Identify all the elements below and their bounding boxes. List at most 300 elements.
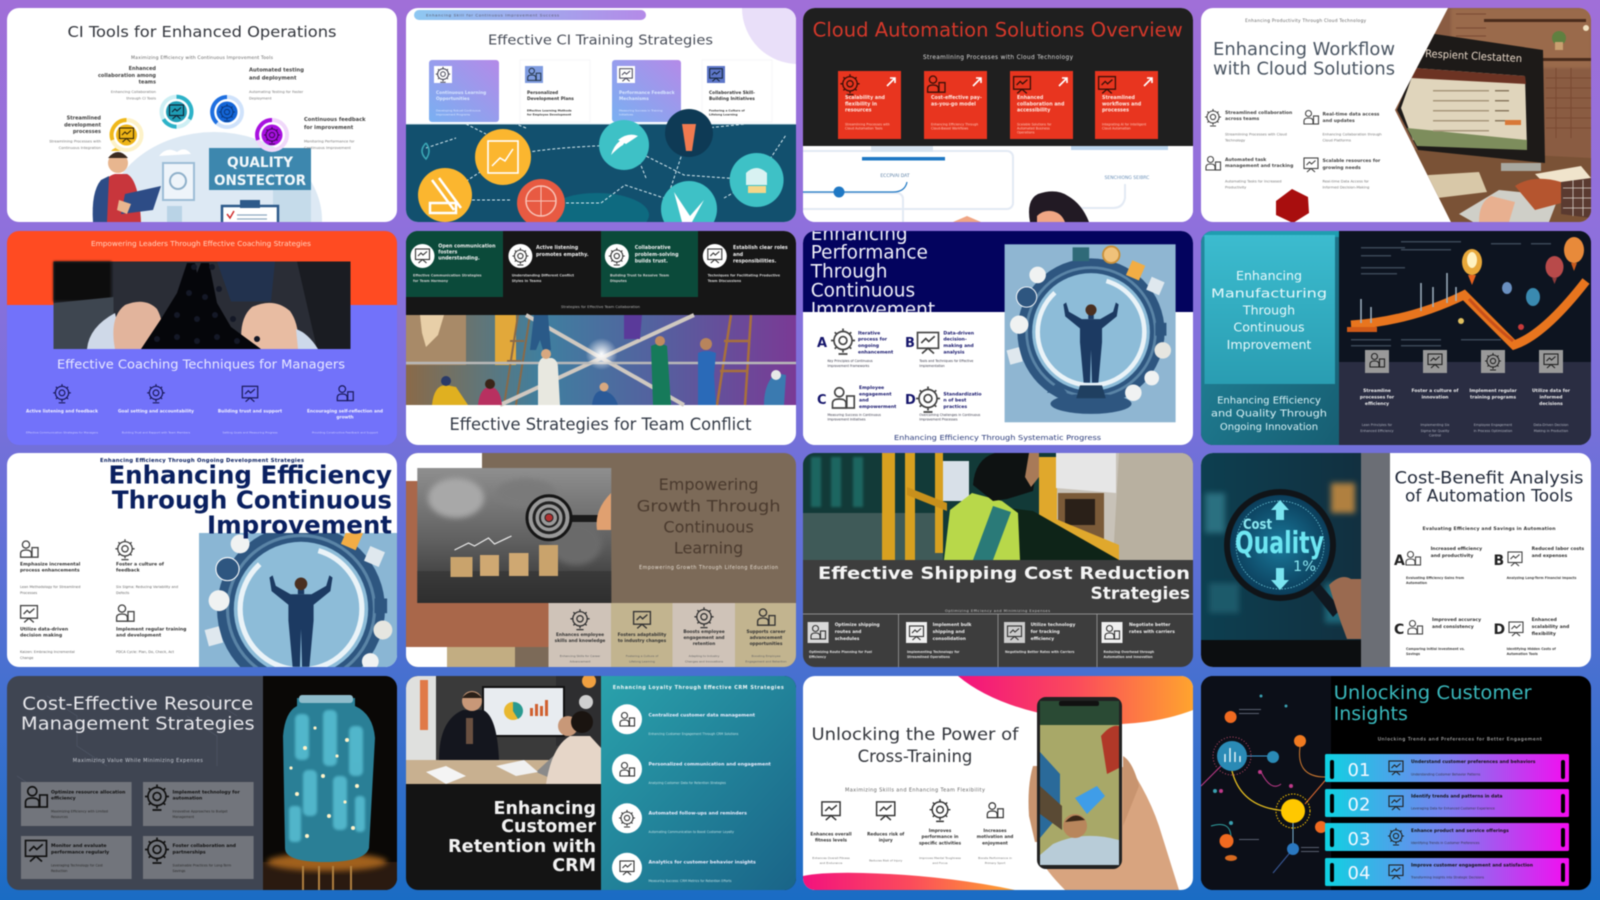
item: streamline <box>1359 350 1394 433</box>
illustration: hand holding phone <box>1028 697 1178 890</box>
item: roles: Team Discussions <box>707 279 741 283</box>
card: monitor: Monitor and evaluate <box>51 843 107 849</box>
card: collaboration: collaboration and <box>1016 101 1064 107</box>
subtitle: Ongoing Innovation <box>1219 422 1318 433</box>
item: training: PDCA Cycle: Plan, Do, Check, Act <box>116 650 175 654</box>
card: development plans: for Employee Development <box>526 112 571 116</box>
card: development plans: Development Plans <box>526 96 574 102</box>
item: bulk <box>906 622 971 659</box>
card: workflows <box>1094 71 1158 139</box>
photo: cafe monitor: Respient Clestatten <box>1424 48 1522 65</box>
item B: Data-driven <box>943 330 974 336</box>
item: incremental: process enhancements <box>20 568 80 574</box>
card: development plans <box>520 60 590 122</box>
photo: blocks and magnifier <box>417 468 611 603</box>
item: adaptability: Fosters adaptability <box>617 632 666 638</box>
item: performance: Improves Mental Toughness <box>919 856 961 860</box>
item: real-time: and updates <box>1322 118 1355 124</box>
photo: magnifying glass <box>1200 453 1390 667</box>
item: engagement: Changes and Innovations <box>684 660 723 664</box>
panel: Enhancing Efficiency Through Continuous Improvement <box>7 453 397 667</box>
item: data: Change <box>20 656 33 660</box>
item: communication: Analyzing Customer Data for Retention Strategies <box>648 781 726 785</box>
item: career <box>734 603 796 667</box>
illustration: quality inspector: QUALITY <box>227 155 294 171</box>
item C <box>816 385 897 421</box>
item: listening: Understanding Different Conflict <box>511 274 574 278</box>
card: collaborative: Fostering a Culture of <box>708 108 745 112</box>
heading: Enhancing Loyalty Through Effective CRM Strategies <box>612 685 783 691</box>
item: collaboration: Streamlined collaboration <box>1224 110 1292 116</box>
bar 02 <box>1324 789 1568 817</box>
illustration: quality inspector: ONSTECTOR <box>214 173 306 189</box>
title: Manufacturing <box>1210 285 1326 300</box>
colour blocks <box>406 453 548 667</box>
card: development plans: Effective Learning Methods <box>526 108 571 112</box>
item: culture: Sigma for Quality <box>1420 429 1449 433</box>
card: feedback: Performance Feedback <box>618 90 674 96</box>
icon: purple ring <box>257 120 287 150</box>
dark header <box>802 8 1192 146</box>
item: resources: Informed Decision-Making <box>1322 185 1369 189</box>
header pill: Enhancing Skill for Continuous Improvement Success <box>426 13 559 18</box>
item: analytics: Measuring Success: CRM Metrics for Retention Efforts <box>648 879 731 883</box>
item: listening <box>508 244 588 283</box>
orange header band <box>7 231 397 305</box>
card: workflows: Cloud Automation <box>1102 126 1130 130</box>
item: tracking <box>1004 622 1075 654</box>
item B: Reduced labor costs <box>1531 546 1584 552</box>
item: routes: Optimize shipping <box>834 622 879 628</box>
item: culture: Six Sigma: Reducing Variability and <box>116 585 178 589</box>
title: Continuous <box>663 518 753 537</box>
illustration: quality inspector <box>93 132 322 308</box>
card: scalability: flexibility in <box>844 101 877 107</box>
panel: Effective Coaching Techniques for Managers <box>7 231 397 445</box>
card: collaboration: accessibility <box>1016 107 1051 113</box>
card: allocation: efficiency <box>51 796 76 802</box>
card: workflows: workflows and <box>1102 101 1141 107</box>
title: Unlocking the Power of <box>811 725 1019 744</box>
title: with Cloud Solutions <box>1212 60 1394 80</box>
panel: Unlocking Customer Insights <box>1200 676 1590 890</box>
item: trust: Building trust and support <box>218 408 282 414</box>
item: listening: Active listening and feedback <box>26 408 98 414</box>
item: communication: Personalized communication and engagement <box>648 762 771 768</box>
item: tasks: Automated task <box>1224 157 1267 163</box>
item: injury: Reduces Risk of Injury <box>869 858 902 862</box>
item: communication <box>612 754 771 785</box>
item: streamline: Enhanced Efficiency <box>1360 429 1393 433</box>
feature: development: Continuous Integration <box>59 146 102 150</box>
item: performance: and Focus <box>932 861 948 865</box>
item: career: advancement <box>749 635 782 641</box>
title: Cost-Effective Resource <box>22 693 253 714</box>
item: career: Boosting Employee <box>751 654 780 658</box>
item: listening: Styles in Teams <box>511 279 541 283</box>
item A: enhancement <box>858 349 894 355</box>
card: partnerships: Savings <box>172 869 186 873</box>
card: collaborative: Lifelong Learning <box>708 112 737 116</box>
item: routes: Optimizing Route Planning for Fuel <box>808 650 872 654</box>
item: roles: Techniques for Facilitating Productive <box>707 274 780 278</box>
panel: Enhancing Workflow with Cloud Solutions <box>1200 8 1590 222</box>
item: tracking: Utilize technology <box>1030 622 1075 628</box>
feature: testing <box>249 67 304 100</box>
card: scalability: Streamlining Processes with <box>844 122 889 126</box>
card: partnerships <box>143 836 254 879</box>
item: training: Implement regular <box>1469 388 1517 394</box>
title: Performance <box>810 242 927 263</box>
card: scalability: Cloud Automation Tools <box>844 126 882 130</box>
subtitle: Maximizing Value While Minimizing Expenses <box>73 758 203 764</box>
panel: Unlocking the Power of Cross-Training <box>802 676 1192 890</box>
item: adaptability: to industry changes <box>617 638 666 644</box>
title: Enhancing Workflow <box>1212 40 1394 60</box>
card: cost-effective <box>924 71 986 139</box>
item: data: Kaizen: Embracing Incremental <box>20 650 75 654</box>
subtitle: Maximizing Efficiency with Continuous Improvement Tools <box>131 55 274 61</box>
bar 01: Understanding Customer Behavior Patterns <box>1410 772 1480 776</box>
item: communication <box>410 244 496 283</box>
bar 03: Identifying Trends in Customer Preferences <box>1410 841 1479 845</box>
item: tracking: Negotiating Better Rates with Carriers <box>1004 650 1074 654</box>
item: adaptability <box>610 603 672 667</box>
item: reflection: growth <box>336 414 354 420</box>
item: problem solving <box>604 244 679 283</box>
card: collaborative: Building Initiatives <box>708 96 755 102</box>
card: partnerships: Sustainable Practices for Long-Term <box>172 863 231 867</box>
item: resources: Real-time Data Access for <box>1322 179 1369 183</box>
item: goal setting: Goal setting and accountability <box>118 408 194 414</box>
card: partnerships: partnerships <box>172 849 206 855</box>
item: bulk: Streamlined Operations <box>906 655 949 659</box>
card: monitor: performance regularly <box>51 849 109 855</box>
item: motivation: Boosts Performance in <box>978 856 1011 860</box>
item: carriers: Automation and Innovation <box>1103 655 1153 659</box>
grid dividers <box>802 614 1192 667</box>
item D: D <box>904 393 916 408</box>
item B <box>1493 546 1584 580</box>
item: training <box>1469 350 1517 433</box>
illustration: dark roadmap with balloons <box>1338 231 1590 362</box>
item: goal setting: Building Trust and Rapport with Team Members <box>122 431 191 435</box>
bar 01: Understand customer preferences and behaviors <box>1410 759 1535 765</box>
card: learning <box>428 60 498 122</box>
item: motivation <box>976 803 1013 865</box>
card: technology: Innovative Approaches to Budget <box>172 810 228 814</box>
item C: and consistency <box>1432 624 1473 630</box>
item: performance: Improves <box>928 828 951 834</box>
item: performance <box>918 799 961 865</box>
title: Cloud Automation Solutions Overview <box>812 19 1182 42</box>
item: resources: growing needs <box>1322 165 1360 171</box>
feature: collaboration: through CI Tools <box>126 96 156 100</box>
item D: Improvement Processes <box>919 417 957 421</box>
card: collaborative <box>702 60 772 122</box>
item D: scalability and <box>1531 624 1569 630</box>
item: training: Implement regular training <box>116 626 186 632</box>
item: communication: Effective Communication Strategies <box>412 274 481 278</box>
item: routes: schedules <box>834 636 859 642</box>
navy header <box>802 231 1192 312</box>
card: technology: Management <box>172 815 195 819</box>
item: culture: innovation <box>1421 394 1448 400</box>
feature: collaboration: Enhancing Collaboration <box>111 90 157 94</box>
item A: and productivity <box>1430 553 1473 559</box>
title: Cost-Benefit Analysis <box>1394 468 1583 488</box>
item: skills <box>548 603 610 667</box>
item: data <box>612 704 755 736</box>
item: data: informed <box>1539 394 1562 400</box>
subtitle: Enhancing Efficiency <box>1217 395 1320 406</box>
item: carriers <box>1101 622 1175 659</box>
item C: and <box>858 398 868 404</box>
item: engagement <box>672 603 734 667</box>
card: allocation: Optimize resource allocation <box>51 789 125 795</box>
item A: A <box>816 336 827 351</box>
item: culture: Foster a culture of <box>1411 388 1458 394</box>
card: collaboration: Operations <box>1016 130 1034 134</box>
title: Retention with <box>448 837 596 857</box>
right teal column <box>600 676 796 890</box>
card: cost-effective: as-you-go model <box>930 101 976 107</box>
title clip band <box>802 312 1002 445</box>
panel: CI Tools for Enhanced Operations <box>7 8 397 222</box>
item: incremental: Processes <box>20 591 37 595</box>
title: Customer <box>501 817 596 837</box>
title: Effective Strategies for Team Conflict <box>449 415 752 434</box>
title: Strategies <box>1090 584 1190 604</box>
card: technology: Implement technology for <box>172 789 240 795</box>
item A: Evaluating Efficiency Gains from <box>1406 576 1464 580</box>
bar 04: 04 <box>1347 863 1370 884</box>
feature: development: processes <box>73 129 101 135</box>
item: training <box>116 605 186 654</box>
photo: warehouse worker <box>802 453 1192 560</box>
item B: analysis <box>943 349 964 355</box>
card: collaboration: Automated Business <box>1016 126 1050 130</box>
item: motivation: enjoyment <box>982 840 1007 846</box>
item: tracking: efficiency <box>1030 636 1054 642</box>
item: training: in Process Optimization <box>1473 429 1512 433</box>
item: listening <box>26 384 98 435</box>
feature: feedback <box>304 117 366 150</box>
footer caption: Enhancing Efficiency Through Systematic Progress <box>894 433 1101 442</box>
card: collaboration <box>1010 71 1072 139</box>
card: feedback: Mechanisms <box>618 96 649 102</box>
feature: testing: Automated testing <box>249 67 304 73</box>
item: trust: Setting Goals and Measuring Progress <box>223 431 278 435</box>
panel: Effective Shipping Cost Reduction Strategies <box>802 453 1192 667</box>
subtitle: Streamlining Processes with Cloud Technology <box>922 55 1073 61</box>
item: reflection: Providing Constructive Feedback and Support <box>312 431 379 435</box>
title: Empowering <box>658 475 758 494</box>
item: training: training programs <box>1469 394 1516 400</box>
band caption: Strategies for Effective Team Collaboration <box>560 305 640 309</box>
panel: Effective Strategies for Team Conflict <box>406 231 796 445</box>
feature: testing: Deployment <box>249 96 272 100</box>
feature: collaboration: collaboration among <box>98 73 156 79</box>
item: real-time <box>1304 110 1381 142</box>
item: data: Utilize data-driven <box>20 626 68 632</box>
item: follow-ups: Automating Communication to Boost Customer Loyalty <box>648 830 734 834</box>
card: monitor: Leveraging Technology for Cost <box>51 863 104 867</box>
item: routes <box>807 622 879 659</box>
card: learning: Opportunities <box>436 96 469 102</box>
title: Enhancing <box>493 799 596 819</box>
card: collaborative: Collaborative Skill- <box>708 90 755 96</box>
item: data: Enhancing Customer Engagement Through CRM Solutions <box>648 732 738 736</box>
panel: Enhancing Manufacturing Through Continuous Improvement <box>1200 231 1590 445</box>
card: partnerships: Foster collaboration and <box>172 843 236 849</box>
card: collaboration: Enhanced <box>1016 95 1043 101</box>
item: carriers: Reducing Overhead through <box>1103 650 1154 654</box>
item: tasks <box>1206 156 1293 189</box>
item: skills: Advancement <box>569 660 591 664</box>
item: culture: feedback <box>116 568 141 574</box>
item: data <box>20 606 75 660</box>
item: bulk: shipping and <box>932 629 964 635</box>
card: cost-effective: Enhancing Efficiency Through <box>930 122 978 126</box>
item: listening: Active listening <box>536 245 578 251</box>
item C: C <box>1394 622 1404 638</box>
title: Effective CI Training Strategies <box>488 32 712 48</box>
card: learning: Improvement Programs <box>436 112 470 116</box>
item C: Improvement Initiatives <box>827 417 865 421</box>
item: problem solving: Collaborative <box>634 245 671 251</box>
item D: practices <box>943 404 967 410</box>
item A: process for <box>858 337 887 343</box>
item: adaptability: Lifelong Learning <box>629 660 655 664</box>
item: communication: for Team Harmony <box>412 279 448 283</box>
bar 01 <box>1324 754 1568 782</box>
item: streamline: processes for <box>1359 394 1394 400</box>
item D: Automation Tools <box>1506 652 1537 656</box>
item: resources: Scalable resources for <box>1322 158 1381 164</box>
item: fitness: Enhances Overall Fitness <box>812 856 850 860</box>
gradient blob top <box>958 676 1192 724</box>
item: career: Engagement and Retention <box>745 660 786 664</box>
feature: collaboration <box>98 66 157 100</box>
item B: Analyzing Long-Term Financial Impacts <box>1506 576 1576 580</box>
title: CI Tools for Enhanced Operations <box>68 23 336 41</box>
item: incremental <box>20 541 81 595</box>
bar 04 <box>1324 858 1568 886</box>
photo: magnifying glass: 1% <box>1292 559 1316 575</box>
subtitle: Enhancing Efficiency Through Ongoing Development Strategies <box>100 458 304 464</box>
item B <box>904 330 974 368</box>
gradient blob bottom <box>802 873 1014 890</box>
illustration: team on ladders <box>406 315 796 405</box>
item C: empowerment <box>858 404 897 410</box>
item B: making and <box>943 343 973 349</box>
card: development plans: Personalized <box>526 90 558 96</box>
item: data <box>1532 350 1570 433</box>
item: data: Utilize data for <box>1532 388 1570 394</box>
item D <box>1493 617 1569 656</box>
item C <box>1394 617 1481 656</box>
photo: glowing jar <box>263 676 397 890</box>
bar 03: Enhance product and service offerings <box>1410 828 1509 834</box>
item: problem solving: Disputes <box>610 279 626 283</box>
item: engagement: Adapting to Industry <box>688 654 719 658</box>
item: routes: Efficiency <box>808 655 827 659</box>
item D: Standardizatio <box>943 391 981 397</box>
item: injury: Reduces risk of <box>867 832 904 838</box>
item: problem solving: Building Trust to Resolve Team <box>610 274 669 278</box>
hex background lines <box>17 696 237 796</box>
card: learning: Continuous Learning <box>436 90 486 96</box>
title: Insights <box>1333 703 1407 725</box>
item: fitness: fitness levels <box>815 838 847 844</box>
feature: development: Streamlined <box>67 116 101 122</box>
feature: development: Streamlining Processes with <box>49 140 102 144</box>
title: Enhancing Efficiency <box>108 460 392 489</box>
title: Unlocking Customer <box>1333 682 1531 704</box>
title: Effective Shipping Cost Reduction <box>818 564 1190 584</box>
item D: Overcoming Challenges in Continuous <box>919 413 980 417</box>
subtitle: and Quality Through <box>1210 409 1326 420</box>
item: incremental: Emphasize incremental <box>20 562 81 568</box>
item C: Employee <box>858 385 884 391</box>
card: cost-effective: Cost-effective pay- <box>930 95 981 101</box>
feature: collaboration: Enhanced <box>129 66 156 72</box>
item: career: opportunities <box>749 641 782 647</box>
item: follow-ups: Automated follow-ups and reminders <box>648 811 747 817</box>
item: routes: routes and <box>834 629 861 635</box>
item: roles: and <box>732 252 743 258</box>
item: performance: specific activities <box>918 840 961 846</box>
item C: Measuring Success in Continuous <box>827 413 881 417</box>
item: roles <box>702 244 787 283</box>
panel: Empowering Growth Through Continuous Learning <box>406 453 796 667</box>
item: data: Making in Production <box>1533 429 1568 433</box>
illustration: process lines and person: ECCPVAI DAT <box>880 173 909 179</box>
panel: Enhancing Performance Through Continuous Improvement <box>802 231 1192 445</box>
item: bulk: Implement bulk <box>932 622 971 628</box>
panel: Cost-Effective Resource Management Strategies <box>7 676 397 890</box>
item A: Iterative <box>858 330 880 336</box>
bar 04: Transforming Insights into Strategic Decisions <box>1410 876 1484 880</box>
card: monitor: Reduction <box>51 869 67 873</box>
photo: magnifying glass: Cost <box>1242 517 1272 533</box>
item: trust <box>218 386 282 435</box>
subtitle: Enhancing Productivity Through Cloud Technology <box>1245 18 1366 24</box>
item: listening: promotes empathy. <box>536 252 588 258</box>
title: Improvement <box>810 300 935 321</box>
item: collaboration: Technology <box>1224 138 1246 142</box>
item: training: and development <box>116 632 162 638</box>
photo: magnifying glass: Quality <box>1234 526 1324 561</box>
card: monitor <box>21 836 132 879</box>
item A <box>816 328 894 368</box>
item: analytics: Analytics for customer behavior insights <box>648 860 756 866</box>
item A <box>1394 546 1482 585</box>
item D: Enhanced <box>1531 617 1556 623</box>
item: carriers: rates with carriers <box>1128 629 1175 635</box>
item B: Tools and Techniques for Effective <box>918 359 973 363</box>
item: tracking: for tracking <box>1030 629 1059 635</box>
item: data: decisions <box>1539 401 1563 407</box>
card: learning: Developing Robust Continuous <box>436 108 480 112</box>
item: motivation: Increases <box>983 828 1007 834</box>
item: roles: responsibilities. <box>732 259 776 265</box>
card: scalability: Scalability and <box>844 95 885 101</box>
panel: Effective CI Training Strategies <box>406 8 796 222</box>
card: technology <box>143 782 254 826</box>
card: collaboration: Scalable Solutions for <box>1016 122 1052 126</box>
